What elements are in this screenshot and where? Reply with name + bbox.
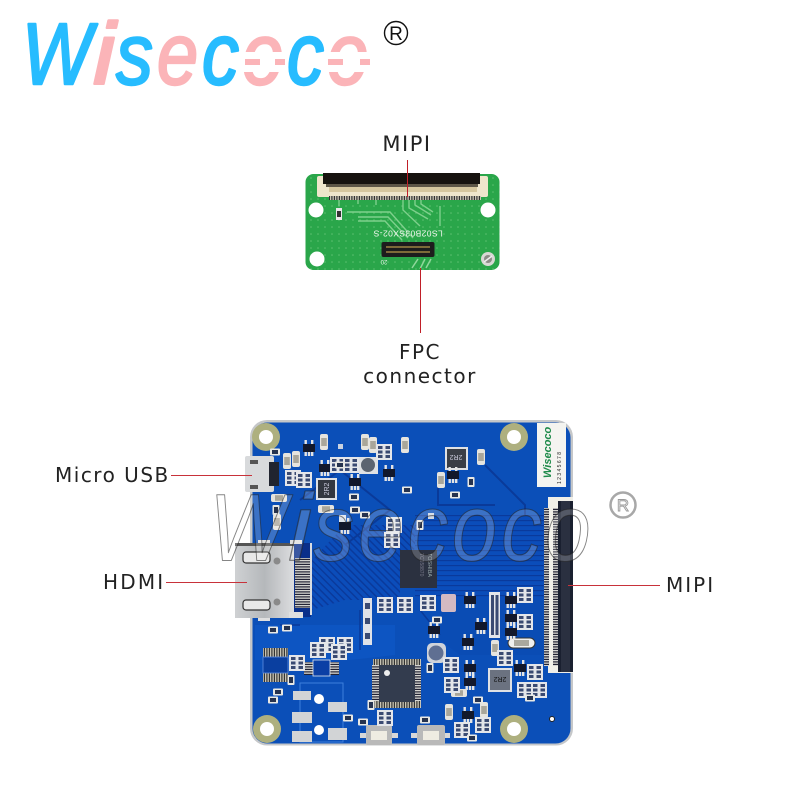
- Toshiba bridge IC: TOSHIBA: [426, 553, 432, 577]
- brand logo: o: [242, 6, 283, 103]
- screw: [481, 252, 495, 266]
- board marking: LS02B03SX02-S: [373, 228, 443, 238]
- label: FPC connector: FPC: [399, 340, 441, 364]
- brand logo: i: [93, 5, 118, 103]
- label: FPC connector: connector: [363, 364, 477, 388]
- watermark over driver board: o: [545, 474, 591, 581]
- trace zones: [255, 465, 545, 742]
- label: HDMI: HDMI: [103, 570, 165, 594]
- power inductors: 2R2: [493, 675, 506, 682]
- blue driver board: [235, 420, 573, 746]
- registered trademark mark: R: [389, 24, 403, 45]
- brand logo: s: [116, 6, 153, 103]
- white serial sticker: 1 2 3 4 5 6 7 8: [557, 452, 563, 484]
- red pointer: right MIPI: [568, 584, 660, 586]
- brand logo: e: [157, 6, 198, 103]
- pink component: [441, 594, 456, 612]
- HDMI connector: [235, 540, 303, 621]
- registered trademark mark: [384, 22, 408, 45]
- QFN chip: [304, 660, 339, 676]
- small board connector: [382, 242, 434, 257]
- white serial sticker: Wisecoco: [542, 426, 554, 478]
- large FPC connector: [544, 497, 573, 673]
- watermark over driver board: c: [408, 474, 448, 581]
- brand logo: W: [22, 6, 98, 103]
- resistor column centre: [363, 598, 372, 645]
- green adapter board: [306, 173, 500, 270]
- power inductors: [316, 447, 512, 692]
- brand logo: c: [287, 6, 324, 103]
- watermark over driver board: [210, 474, 591, 581]
- watermark over driver board: i: [288, 474, 316, 581]
- HDMI pin field: [293, 543, 312, 617]
- LQFP microcontroller: [372, 659, 421, 708]
- resistor stack column: [489, 592, 500, 638]
- red pointer: HDMI: [166, 582, 247, 584]
- power inductors: 2R2: [324, 482, 331, 495]
- brand logo: [22, 5, 374, 103]
- watermark over driver board: o: [452, 474, 497, 581]
- watermark over driver board: s: [313, 474, 354, 581]
- SOP chip: [263, 648, 288, 682]
- label: FPC connector: [363, 340, 477, 388]
- corner mounting holes: [252, 423, 528, 743]
- label: Micro USB: Micro USB: [55, 463, 170, 487]
- small SMD part: [336, 208, 342, 220]
- red pointer: FPC connector: [420, 268, 422, 333]
- crystal: [508, 638, 535, 648]
- red pointer: top MIPI: [406, 160, 408, 197]
- Toshiba bridge IC: TC358870: [418, 553, 424, 577]
- micro USB connector: [245, 456, 279, 492]
- test point: [338, 444, 554, 722]
- board outline: [250, 420, 573, 746]
- watermark trademark mark: R: [617, 496, 629, 515]
- label: MIPI top: MIPI: [382, 132, 432, 156]
- watermark over driver board: W: [210, 474, 293, 581]
- small passive components: [268, 434, 547, 742]
- connector traces: [412, 259, 431, 269]
- watermark trademark mark: [610, 492, 636, 518]
- push buttons: [360, 725, 450, 745]
- tact switch pads: [292, 691, 347, 742]
- brand logo: c: [202, 6, 239, 103]
- brand logo: o: [327, 6, 368, 103]
- Toshiba bridge IC: [400, 550, 437, 588]
- mounting holes: [308, 202, 496, 266]
- power inductors: 2R2: [449, 453, 462, 460]
- watermark over driver board: e: [358, 474, 404, 581]
- top FPC connector: [317, 173, 488, 200]
- pin marking: 20: [380, 258, 387, 264]
- board traces: [339, 197, 440, 240]
- blue solder mask: [252, 422, 570, 744]
- label: right MIPI: MIPI: [666, 573, 715, 597]
- watermark over driver board: c: [501, 474, 542, 581]
- white serial sticker: [537, 423, 566, 487]
- red pointer: micro USB: [171, 474, 252, 476]
